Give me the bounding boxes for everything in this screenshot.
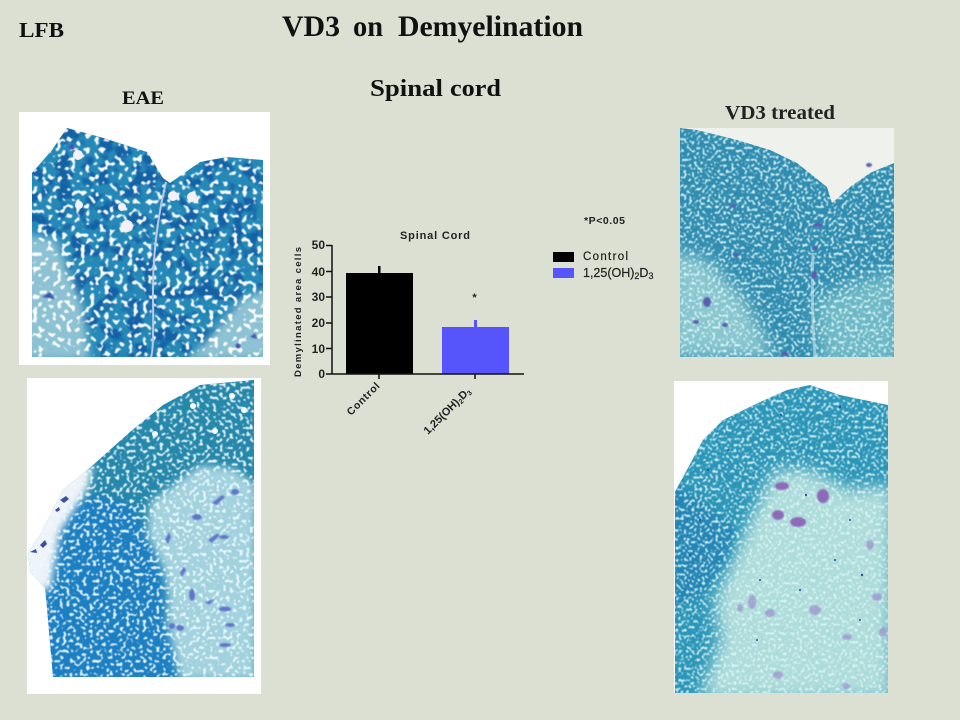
title: [282, 10, 583, 43]
micrograph: VD3 lower: [672, 381, 892, 700]
legend: D: [639, 266, 648, 280]
y axis label: Demylinated area cells: [293, 247, 304, 377]
y ticks: 40: [312, 265, 325, 279]
label: LFB: LFB: [19, 18, 64, 42]
p value note: *P<0.05: [584, 215, 625, 227]
x label: 1,25(OH)2D3: 1,25(OH): [422, 397, 462, 437]
y axis: [326, 245, 332, 374]
x label: 1,25(OH)2D3: 2: [458, 398, 466, 406]
legend: [553, 251, 653, 281]
y ticks: 0: [318, 367, 325, 381]
chart title: Spinal Cord: [400, 230, 470, 242]
bar chart: demyelinated area cells: [293, 230, 524, 438]
x label: 1,25(OH)2D3: D: [456, 388, 471, 402]
title: VD3: [282, 10, 340, 43]
x axis: [332, 374, 524, 379]
y ticks: 20: [312, 316, 325, 330]
y ticks: [312, 238, 325, 381]
significance star: *: [472, 292, 477, 304]
heading: VD3 treated: VD3 treated: [725, 102, 835, 124]
bar: 1,25(OH)2D3: [442, 320, 509, 374]
legend: 1,25(OH): [583, 266, 634, 280]
x label: 1,25(OH)2D3: 3: [466, 390, 474, 397]
heading: Spinal cord: Spinal: [370, 76, 443, 102]
heading: Spinal cord: [370, 76, 502, 102]
title: Demyelination: [398, 10, 583, 43]
y ticks: 10: [312, 342, 325, 356]
legend: 3: [648, 271, 653, 281]
micrograph: VD3 upper: [680, 128, 894, 357]
heading: Spinal cord: cord: [450, 76, 502, 102]
micrograph: EAE upper: [19, 112, 270, 365]
x label: Control: Control: [345, 380, 383, 418]
bar: control: [346, 266, 413, 374]
y ticks: 30: [312, 290, 325, 304]
heading: EAE: EAE: [122, 88, 164, 109]
legend: Control: [583, 251, 628, 263]
title: on: [353, 10, 383, 43]
y ticks: 50: [312, 238, 325, 252]
legend: 2: [634, 271, 639, 281]
micrograph: EAE lower: [20, 375, 261, 694]
